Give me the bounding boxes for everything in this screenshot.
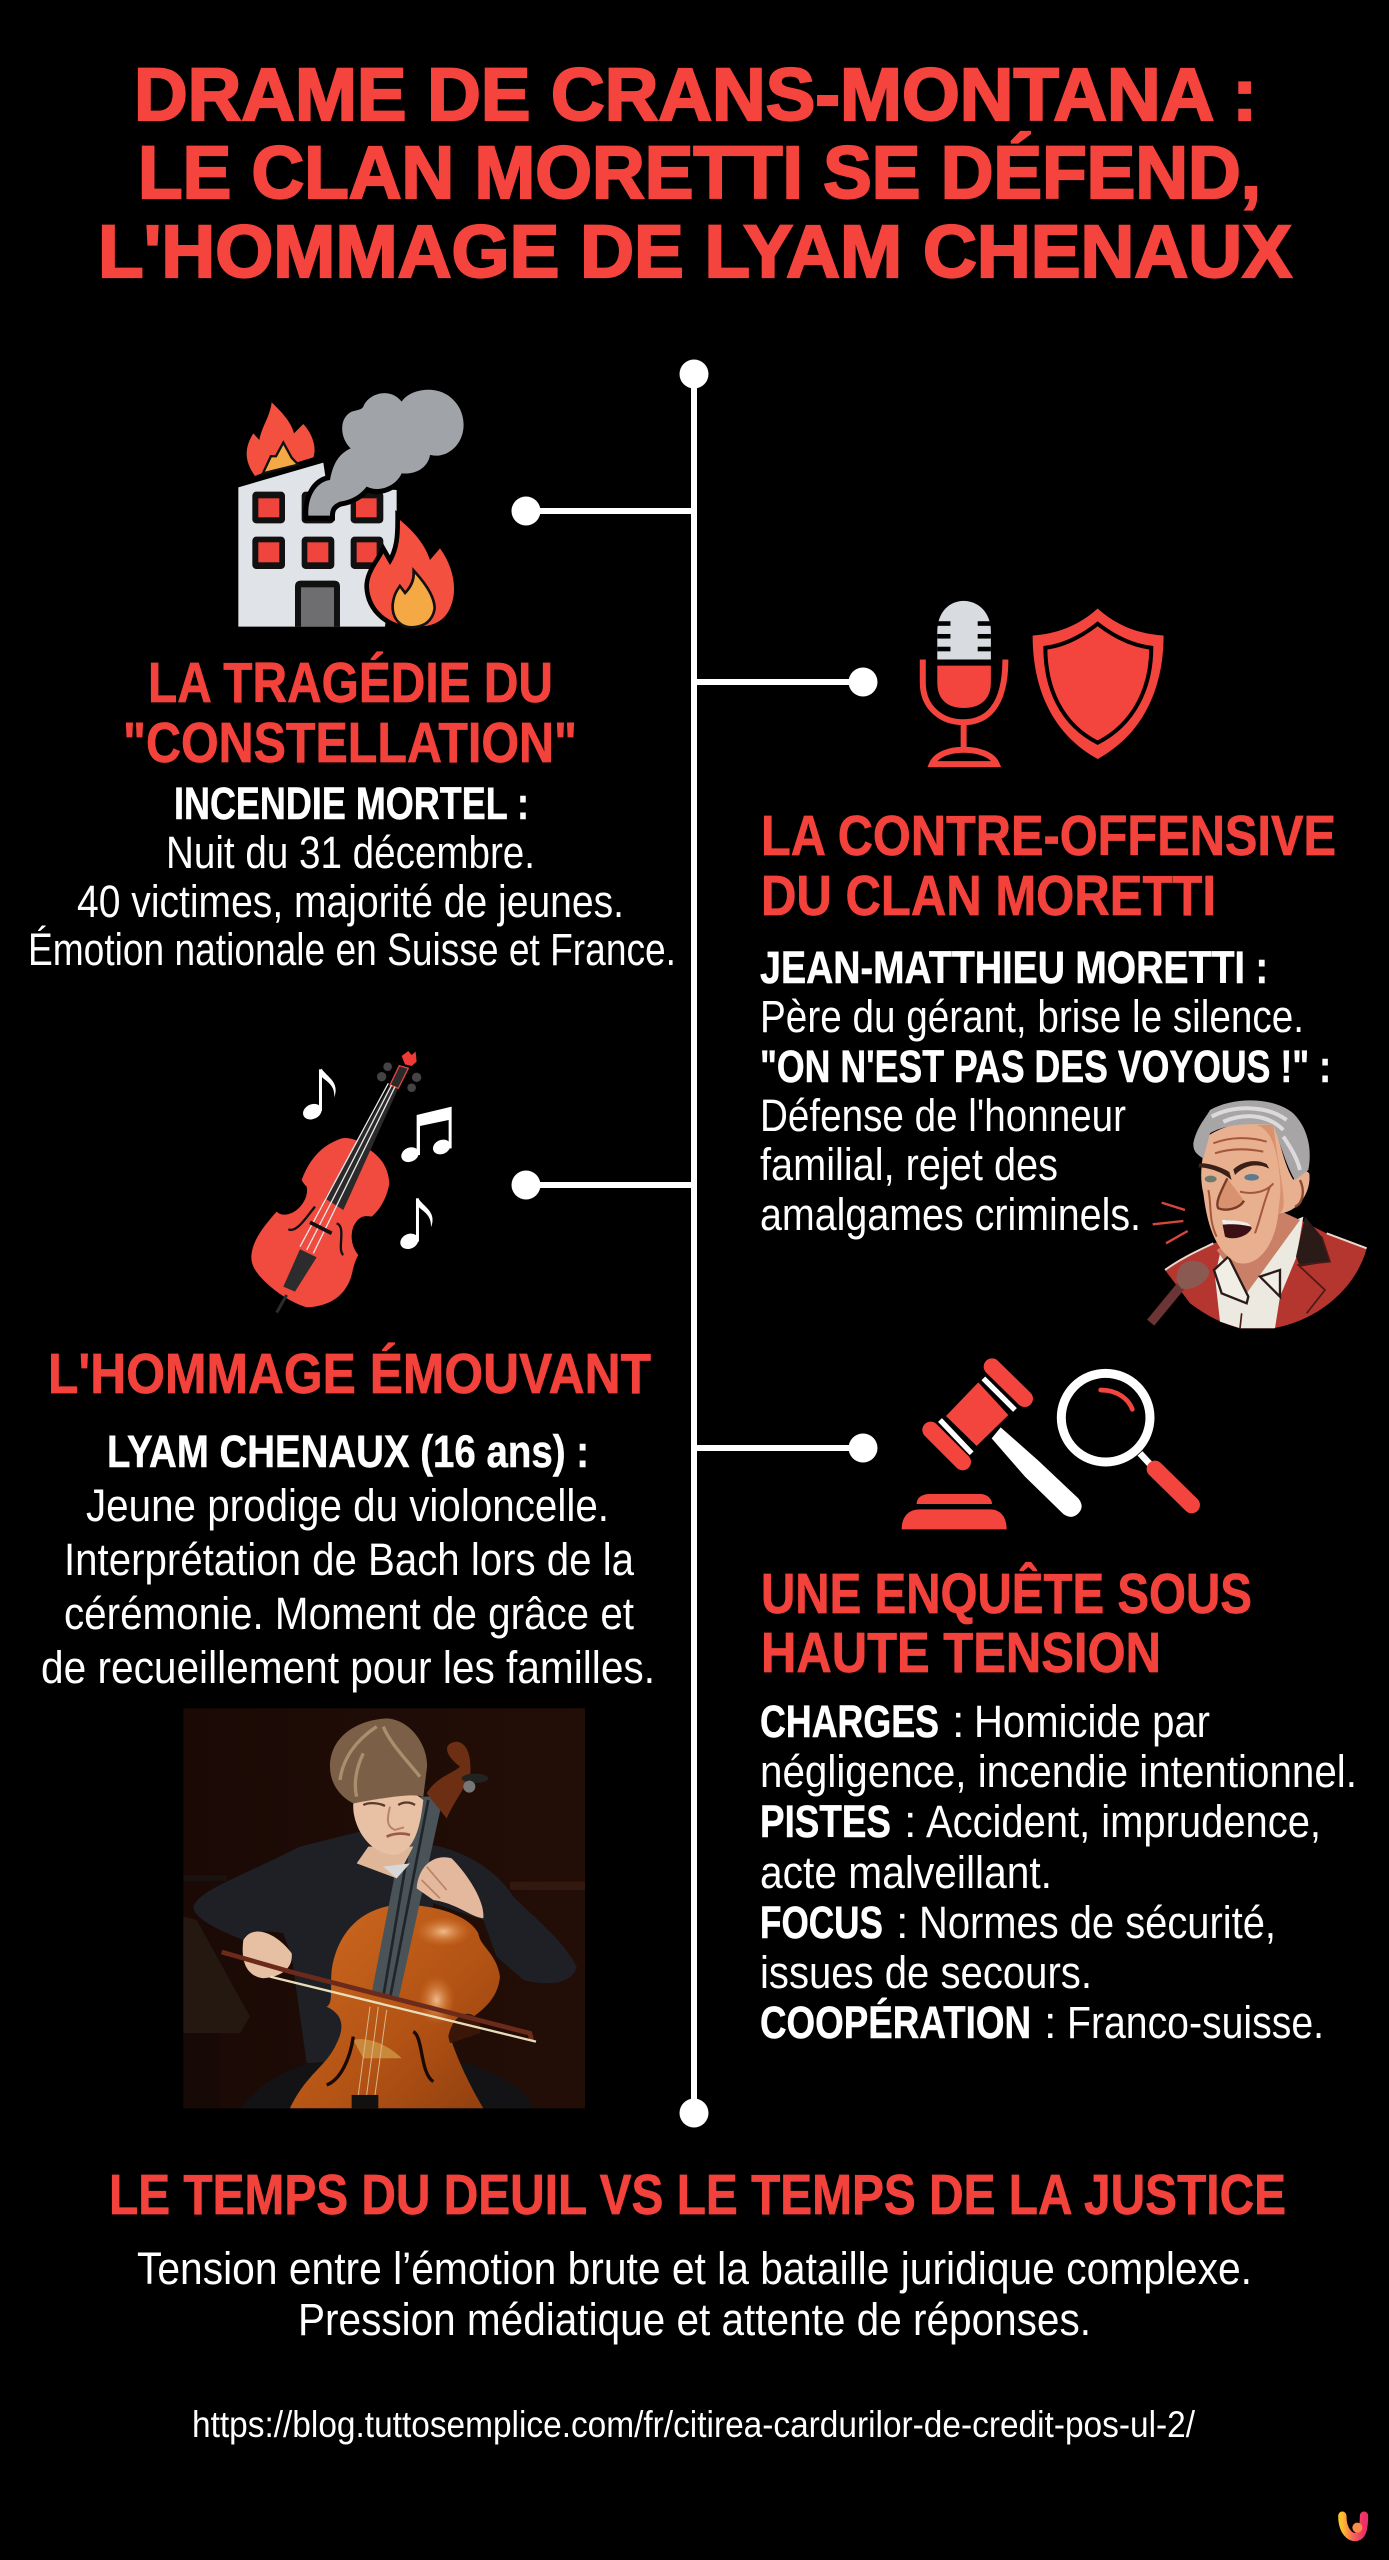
text: charges, pistes, focus, coopération: Accident, imprudence,: [926, 1796, 1321, 1847]
timeline: [512, 360, 878, 2128]
text: lyam chenaux: [41, 1426, 655, 1693]
text: incendie mortel: Nuit du 31 décembre.: [166, 827, 535, 878]
heading: contre-offensive: DU CLAN MORETTI: [761, 864, 1216, 928]
text: jean-matthieu moretti: familial, rejet des: [760, 1139, 1058, 1190]
text: charges, pistes, focus, coopération: Normes de sécurité,: [919, 1897, 1276, 1948]
text: charges, pistes, focus, coopération: [760, 1696, 1357, 2048]
text: charges, pistes, focus, coopération: issues de secours.: [760, 1947, 1092, 1998]
text: charges, pistes, focus, coopération: COOPÉRATION: [760, 1997, 1031, 2048]
photo: young cellist: [183, 1708, 585, 2108]
title: [98, 53, 1292, 293]
text: conclusion: Pression médiatique et attente de réponses.: [298, 2294, 1091, 2345]
text: conclusion: [137, 2243, 1252, 2345]
icon: gavel: [902, 1367, 1082, 1529]
text: jean-matthieu moretti: Père du gérant, brise le silence.: [760, 991, 1304, 1042]
source url: https://blog.tuttosemplice.com/fr/citirea-cardurilor-de-credit-pos-ul-2/: [192, 2404, 1196, 2445]
heading: l'hommage: L'HOMMAGE ÉMOUVANT: [48, 1342, 651, 1406]
heading: enquête: HAUTE TENSION: [761, 1621, 1161, 1685]
text: conclusion: Tension entre l’émotion brute et la bataille juridique complexe.: [137, 2243, 1252, 2294]
title: DRAME DE CRANS-MONTANA :: [134, 53, 1257, 136]
text: charges, pistes, focus, coopération: Franco-suisse.: [1067, 1997, 1324, 2048]
icon: magnifying glass: [1061, 1373, 1192, 1505]
title: L'HOMMAGE DE LYAM CHENAUX: [98, 210, 1292, 293]
text: charges, pistes, focus, coopération: PISTES: [760, 1796, 891, 1847]
icon: violin with notes: [251, 1051, 453, 1313]
text: jean-matthieu moretti: amalgames criminels.: [760, 1189, 1141, 1240]
icon: logo: [1342, 2516, 1364, 2537]
heading: la tragédie: [123, 651, 577, 775]
icon: microphone: [923, 601, 1005, 764]
illustration: angry man at microphone: [1151, 1100, 1367, 1328]
heading: contre-offensive: [761, 804, 1336, 928]
title: LE CLAN MORETTI SE DÉFEND,: [138, 131, 1261, 214]
text: charges, pistes, focus, coopération: :: [904, 1796, 917, 1847]
text: charges, pistes, focus, coopération: :: [896, 1897, 909, 1948]
text: lyam chenaux: LYAM CHENAUX (16 ans) :: [107, 1426, 589, 1477]
icon: shield: [1033, 608, 1164, 759]
text: incendie mortel: 40 victimes, majorité de jeunes.: [77, 876, 624, 927]
icon: burning building: [238, 390, 464, 627]
text: charges, pistes, focus, coopération: :: [1044, 1997, 1057, 2048]
text: charges, pistes, focus, coopération: :: [952, 1696, 965, 1747]
heading: enquête: UNE ENQUÊTE SOUS: [761, 1561, 1252, 1626]
text: lyam chenaux: Interprétation de Bach lors de la: [64, 1534, 635, 1585]
text: lyam chenaux: Jeune prodige du violoncelle.: [86, 1480, 609, 1531]
heading: la tragédie: LA TRAGÉDIE DU: [148, 651, 553, 715]
text: charges, pistes, focus, coopération: FOCUS: [760, 1897, 883, 1948]
text: jean-matthieu moretti: JEAN-MATTHIEU MORETTI :: [760, 942, 1268, 993]
text: lyam chenaux: cérémonie. Moment de grâce et: [64, 1588, 634, 1639]
text: jean-matthieu moretti: [760, 942, 1331, 1240]
text: jean-matthieu moretti: Défense de l'honneur: [760, 1090, 1126, 1141]
text: charges, pistes, focus, coopération: CHARGES: [760, 1696, 939, 1747]
heading: enquête: [761, 1561, 1252, 1685]
text: charges, pistes, focus, coopération: Homicide par: [974, 1696, 1210, 1747]
text: incendie mortel: [28, 778, 676, 975]
text: charges, pistes, focus, coopération: acte malveillant.: [760, 1847, 1052, 1898]
text: incendie mortel: Émotion nationale en Suisse et France.: [28, 924, 676, 975]
text: lyam chenaux: de recueillement pour les familles.: [41, 1642, 655, 1693]
heading: la tragédie: "CONSTELLATION": [123, 711, 577, 775]
text: incendie mortel: INCENDIE MORTEL :: [174, 778, 529, 829]
